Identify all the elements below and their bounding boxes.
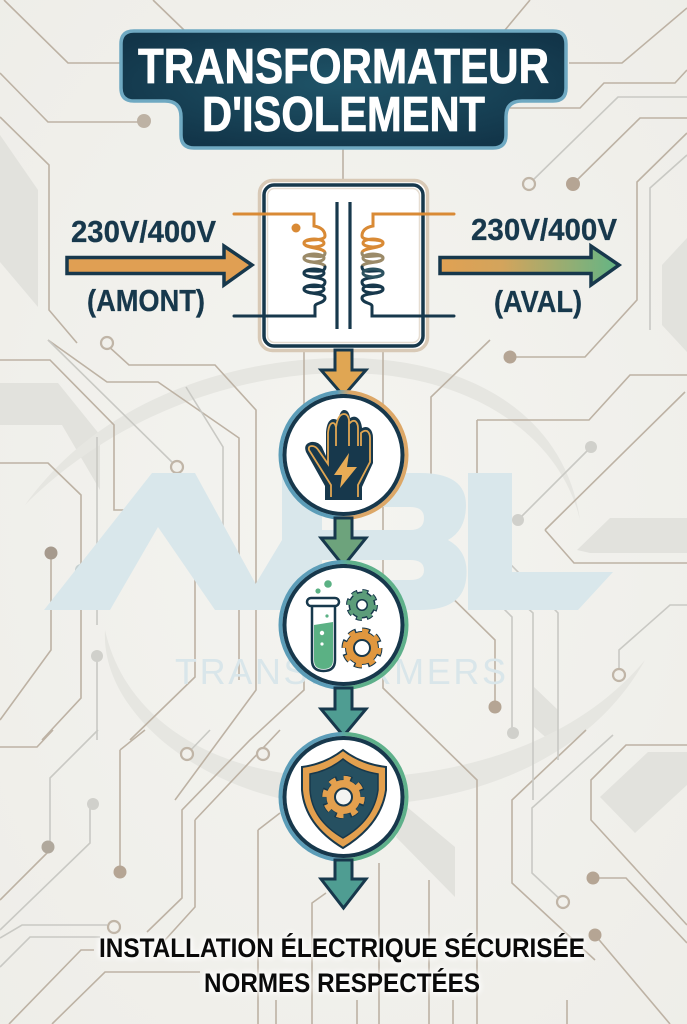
primary winding (234, 214, 325, 316)
step 2: testing circle (280, 562, 406, 688)
step 1: insulating glove circle (280, 392, 406, 518)
conclusion text line 2: NORMES RESPECTÉES (204, 967, 480, 998)
polarity dot (292, 224, 300, 232)
grey background shapes (0, 135, 687, 897)
arrow 2: gloves to tests (321, 518, 366, 566)
input arrow (67, 246, 252, 285)
transformer core (337, 202, 350, 329)
icon: shield (302, 750, 386, 848)
icon: lightning bolt (334, 453, 357, 488)
title line 2: D'ISOLEMENT (202, 88, 485, 142)
output arrow (440, 246, 619, 285)
input voltage label: 230V/400V (71, 214, 216, 249)
ABL logo watermark (44, 473, 613, 610)
conclusion text line 1: INSTALLATION ÉLECTRIQUE SÉCURISÉE (99, 932, 585, 963)
amont label: (AMONT) (87, 283, 205, 318)
arrow 3: tests to protection (321, 688, 366, 736)
title line 1: TRANSFORMATEUR (138, 40, 549, 94)
title banner (121, 31, 566, 148)
arrow 4: protection to conclusion (321, 860, 366, 908)
icon: shield gear (326, 779, 362, 815)
watermark swoosh (25, 358, 645, 806)
aval label: (AVAL) (494, 284, 582, 319)
output voltage label: 230V/400V (471, 212, 617, 247)
icon: test tube (307, 580, 339, 671)
step 3: protection shield circle (280, 734, 406, 860)
watermark wordmark: TRANSFORMERS (175, 651, 506, 692)
transformer symbol (234, 180, 454, 350)
icon: orange gear (345, 631, 379, 665)
secondary winding (362, 214, 454, 316)
icon: green gear (349, 592, 375, 618)
arrow 1: transformer to gloves (321, 350, 366, 396)
icon: insulating glove (305, 410, 373, 500)
circuit nodes (42, 114, 625, 942)
